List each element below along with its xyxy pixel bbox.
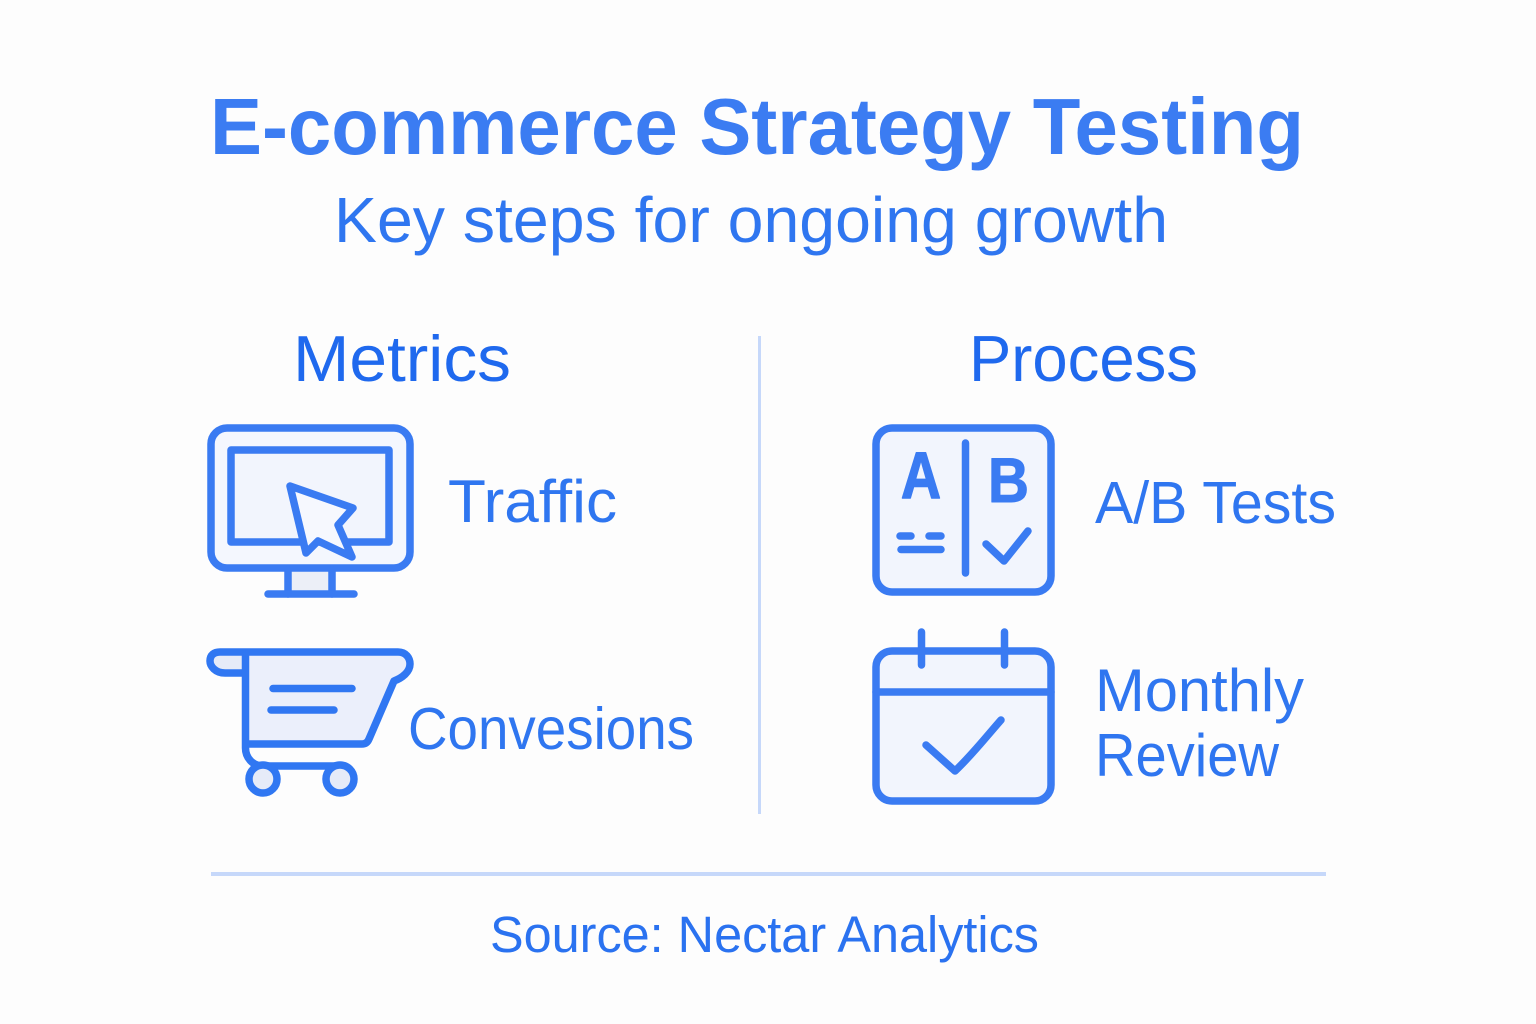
icon: A/B test: B bbox=[988, 446, 1029, 516]
label: a/b tests: A/B Tests bbox=[1095, 470, 1336, 536]
label: monthly review: Monthly bbox=[1095, 657, 1304, 724]
heading: metrics: Metrics bbox=[293, 322, 511, 395]
icon: shopping cart bbox=[210, 652, 410, 793]
label: monthly review bbox=[1095, 657, 1304, 789]
source: Source: Nectar Analytics bbox=[490, 906, 1039, 963]
footer divider bbox=[211, 872, 1326, 876]
center divider bbox=[758, 336, 761, 814]
subtitle: Key steps for ongoing growth bbox=[334, 184, 1168, 256]
label: conversions: Convesions bbox=[408, 696, 694, 762]
icon: calendar bbox=[876, 632, 1051, 801]
title: E-commerce Strategy Testing bbox=[210, 82, 1304, 171]
label: monthly review: Review bbox=[1095, 722, 1280, 789]
icon: A/B test bbox=[876, 428, 1051, 592]
icon: monitor with cursor bbox=[211, 428, 410, 594]
label: traffic: Traffic bbox=[448, 468, 617, 535]
icon: A/B test: A bbox=[901, 438, 941, 512]
heading: process: Process bbox=[969, 322, 1198, 395]
